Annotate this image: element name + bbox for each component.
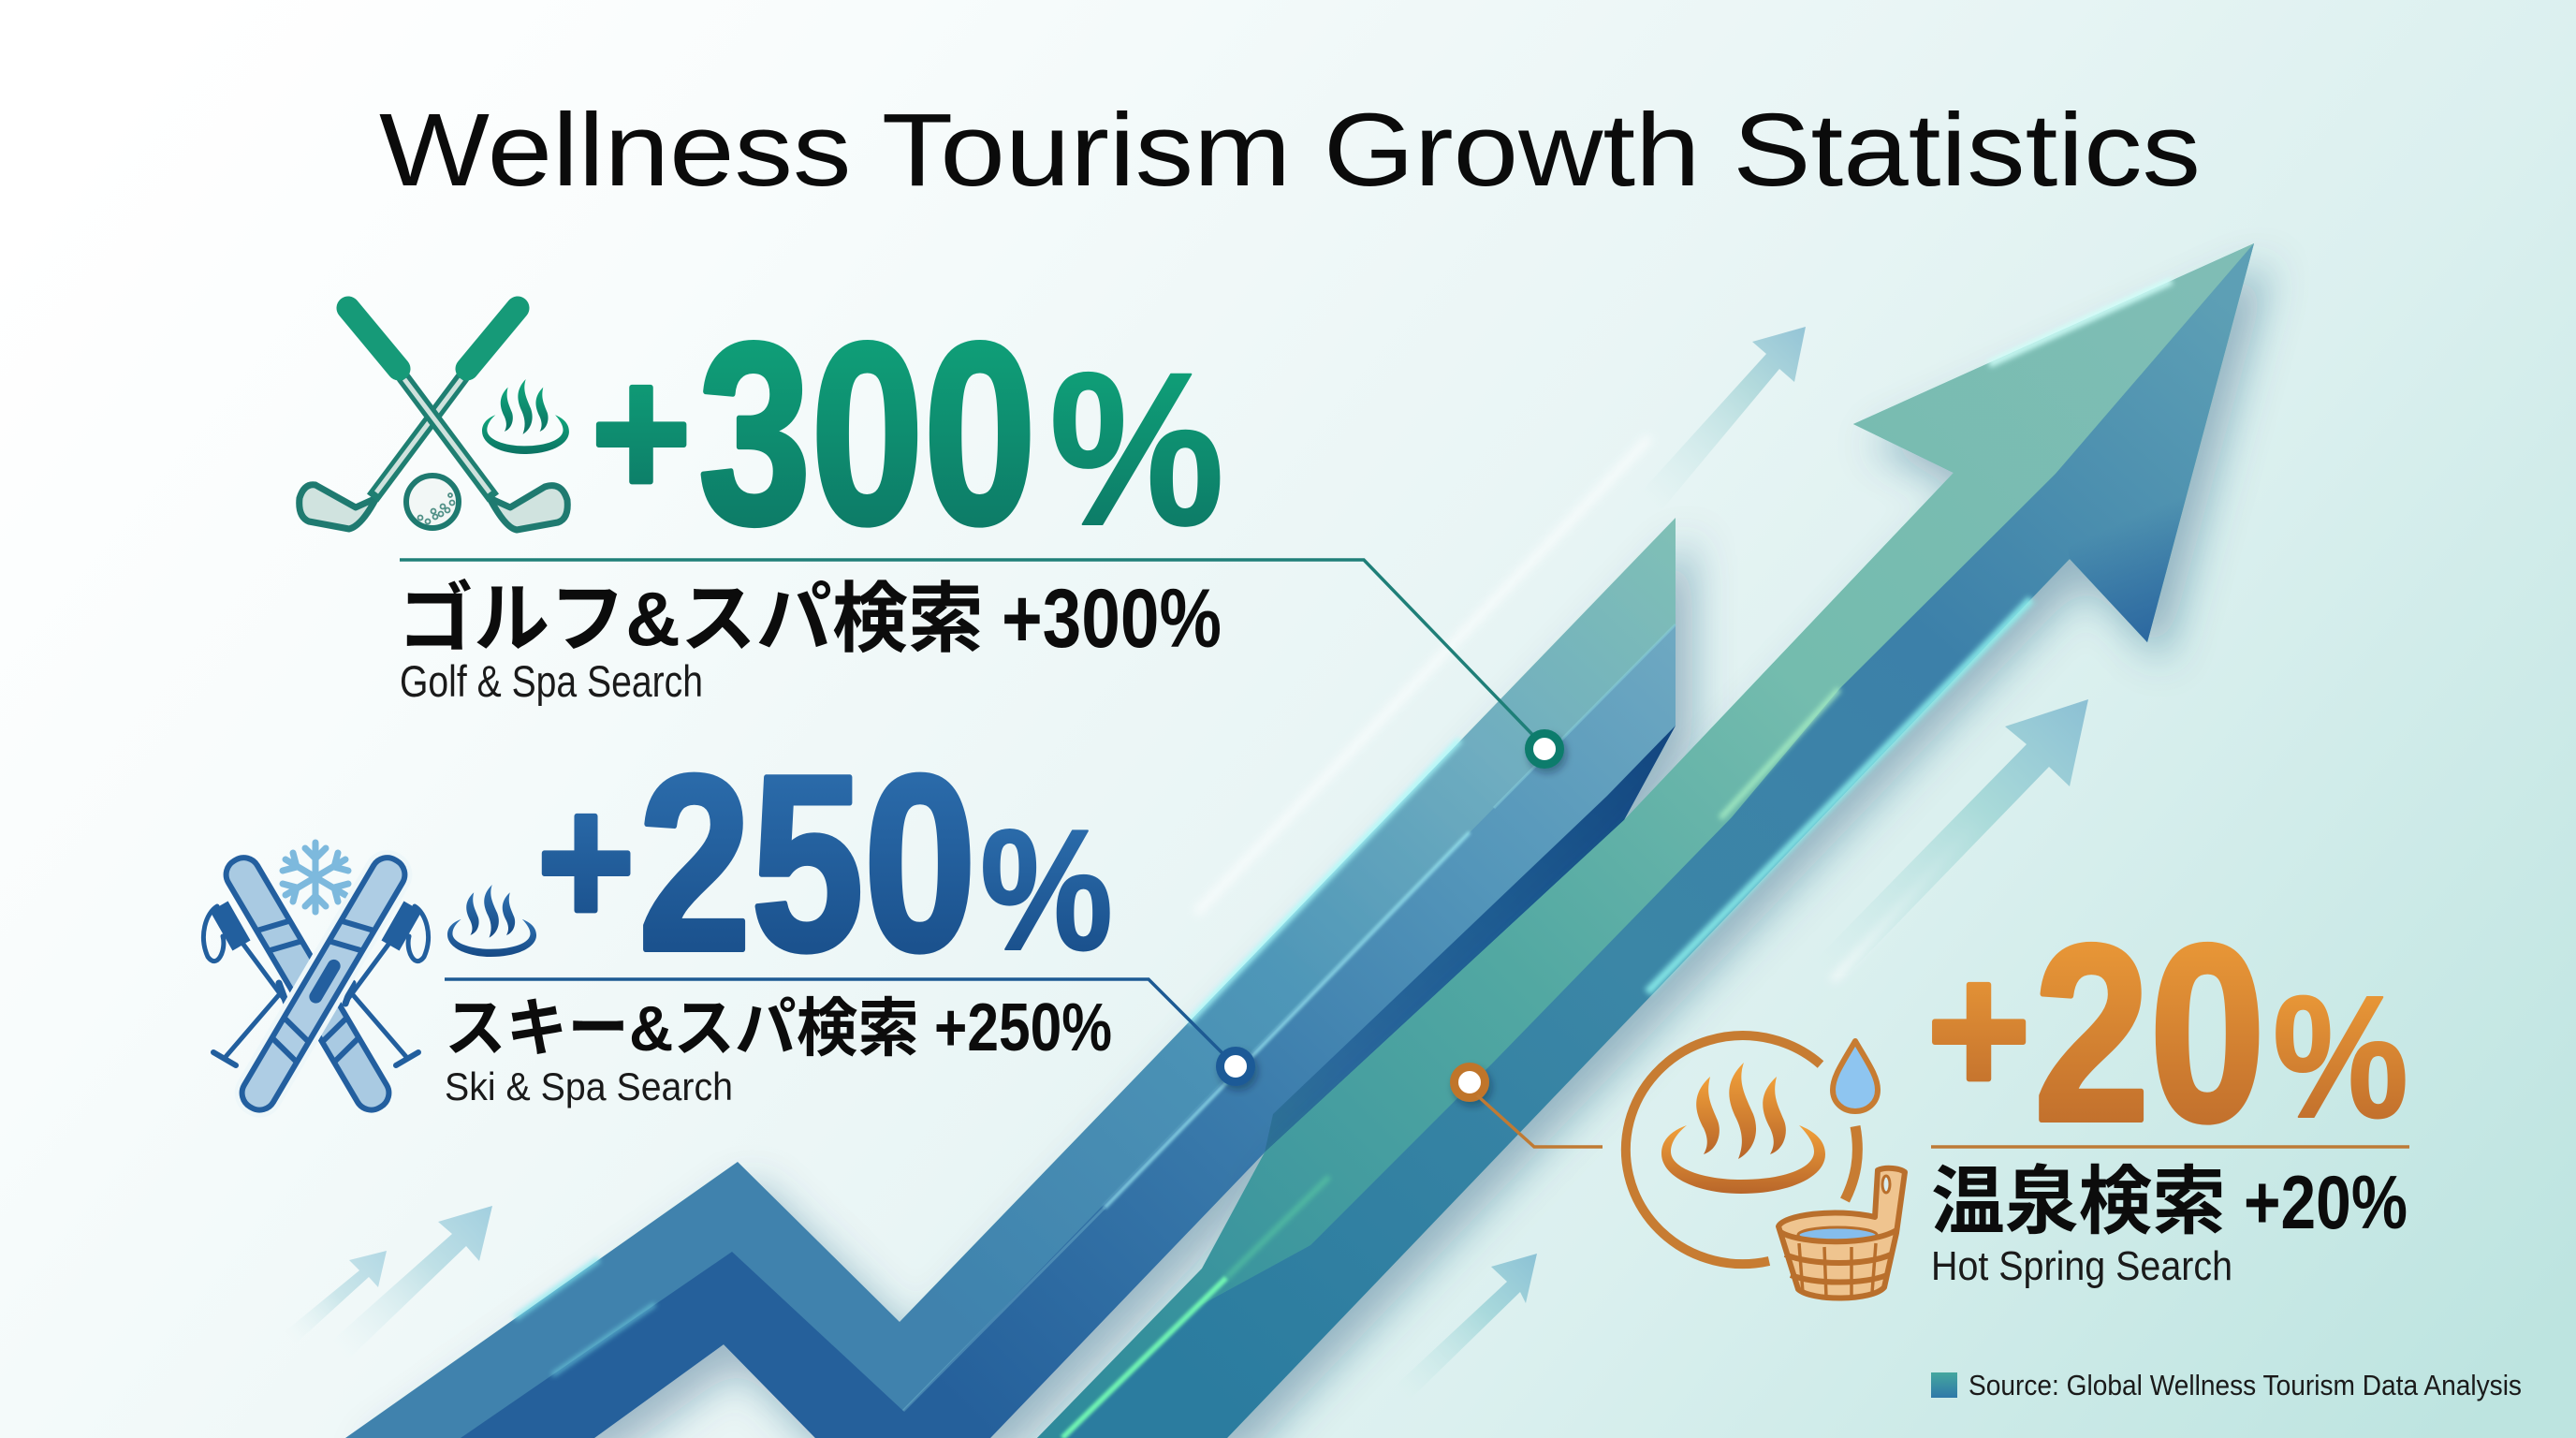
icon: hot spring with water drop and wooden bucket — [1626, 1035, 1905, 1299]
stat: +300%: 300 — [698, 290, 1036, 578]
subtitle: golf: Golf & Spa Search — [400, 656, 703, 706]
stat: +250%: % — [980, 793, 1113, 986]
main up arrow — [1037, 243, 2254, 1438]
stat: +300%: + — [592, 329, 691, 536]
icon: crossed skis with snowflake and onsen mark — [203, 843, 536, 1116]
golf ball — [406, 476, 459, 528]
subtitle: ski: Ski & Spa Search — [445, 1064, 733, 1108]
onsen mark green — [482, 379, 569, 454]
golf club shafts — [373, 376, 493, 498]
front ski — [236, 852, 411, 1116]
small arrow: upper centre — [1629, 327, 1806, 510]
small arrow: lower left small — [276, 1251, 387, 1344]
stat: +250%: + — [537, 757, 635, 964]
heading: ski and spa search: スキー&スパ検索 — [445, 993, 919, 1064]
zig-zag blue arrow — [345, 518, 1676, 1438]
value: +300% small: +300% — [1002, 571, 1222, 665]
water drop — [1833, 1041, 1878, 1111]
stat: +20%: + — [1927, 926, 2030, 1133]
stat: +20%: 20 — [2034, 892, 2265, 1173]
stat: +300% — [592, 290, 1224, 578]
golf club grips — [348, 308, 518, 369]
heading: hot spring search: 温泉検索 — [1931, 1160, 2226, 1243]
source note: Source: Global Wellness Tourism Data Analysis — [1969, 1369, 2522, 1401]
snowflake — [283, 843, 348, 912]
small arrow: lower centre — [1385, 1254, 1537, 1400]
marker: ski — [1221, 1050, 1251, 1082]
ski poles — [203, 906, 429, 1065]
divider: hot spring — [1931, 1145, 2409, 1149]
stat: +300%: % — [1049, 328, 1224, 571]
title: Wellness Tourism Growth Statistics — [379, 93, 2201, 208]
wooden bucket — [1778, 1168, 1905, 1299]
subtitle: hot spring: Hot Spring Search — [1931, 1243, 2232, 1289]
light streaks — [1198, 440, 1975, 978]
onsen mark blue — [447, 885, 536, 957]
connector: hot spring — [1477, 1095, 1603, 1147]
back ski — [220, 852, 395, 1116]
connector: ski — [445, 979, 1236, 1066]
value: +20% small: +20% — [2244, 1161, 2408, 1245]
heading: golf and spa search: ゴルフ&スパ検索 — [398, 577, 984, 662]
small arrow: lower left large — [318, 1206, 492, 1359]
stat: +20%: % — [2273, 961, 2408, 1154]
ring arcs — [1626, 1035, 1857, 1264]
small arrow: right — [1802, 699, 2088, 974]
value: +250% small: +250% — [934, 990, 1112, 1065]
golf club heads — [300, 485, 567, 530]
stat: +250%: 250 — [638, 723, 976, 1003]
stat: +20% — [1927, 892, 2408, 1173]
connector: golf — [400, 560, 1546, 749]
marker: hot spring — [1455, 1067, 1485, 1097]
icon: crossed golf clubs with onsen mark — [300, 308, 569, 530]
onsen mark orange — [1661, 1063, 1825, 1194]
marker: golf — [1530, 734, 1559, 764]
